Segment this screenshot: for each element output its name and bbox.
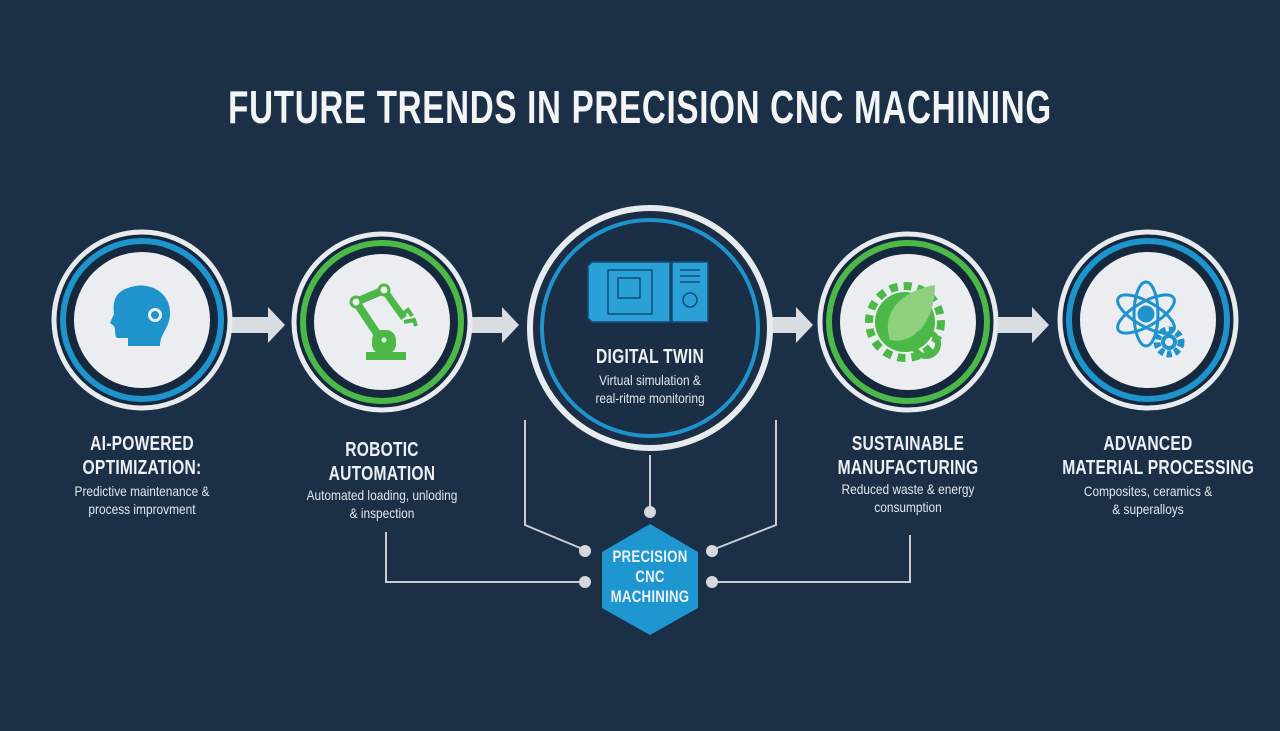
text: Virtual simulation &: [599, 372, 701, 388]
icon: leaf gear: [869, 285, 941, 358]
icon: robot arm: [351, 285, 416, 360]
icon: atom gear: [1112, 282, 1181, 354]
circle: Sustainable: [820, 234, 996, 410]
hexagon label: CNC: [635, 567, 665, 586]
title: FUTURE TRENDS IN PRECISION CNC MACHINING: [228, 81, 1052, 133]
text: sustainable: consumption: [874, 499, 942, 515]
text: robotic: & inspection: [350, 505, 414, 521]
text: sustainable: MANUFACTURING: [838, 457, 978, 479]
text: robotic: ROBOTIC: [345, 439, 419, 461]
text: sustainable: Reduced waste & energy: [842, 481, 974, 497]
text: advanced: & superalloys: [1112, 501, 1184, 517]
text: advanced: MATERIAL PROCESSING: [1062, 457, 1254, 479]
icon: cnc machine: [588, 262, 708, 322]
circle: AI: [54, 232, 230, 408]
circle: Robotic: [294, 234, 470, 410]
text: AI: Predictive maintenance &: [75, 483, 209, 499]
hexagon label: PRECISION: [612, 547, 688, 566]
text: sustainable: [838, 433, 978, 515]
text: real-ritme monitoring: [595, 390, 705, 406]
text: AI: OPTIMIZATION:: [83, 457, 201, 479]
text: robotic: AUTOMATION: [329, 463, 435, 485]
text: robotic: [306, 439, 457, 521]
text: sustainable: SUSTAINABLE: [852, 433, 964, 455]
arrows: [230, 307, 1049, 343]
text: DIGITAL TWIN: [596, 346, 704, 368]
icon: head with brain: [110, 286, 170, 346]
text: advanced: Composites, ceramics &: [1084, 483, 1212, 499]
text: AI: AI-POWERED: [90, 433, 194, 455]
text: AI: process improvment: [88, 501, 196, 517]
text: AI: [75, 433, 210, 517]
hexagon: [602, 524, 698, 635]
text: robotic: Automated loading, unloding: [307, 487, 457, 503]
text: advanced: ADVANCED: [1103, 433, 1193, 455]
circle: Advanced: [1060, 232, 1236, 408]
text: advanced: [1062, 433, 1254, 517]
connector dots: [579, 506, 718, 588]
center label: digital twin: [595, 346, 705, 406]
circle: Digital twin: [530, 208, 770, 448]
connector lines: [386, 420, 910, 582]
hexagon label: MACHINING: [611, 587, 689, 606]
hexagon label: [611, 547, 689, 606]
